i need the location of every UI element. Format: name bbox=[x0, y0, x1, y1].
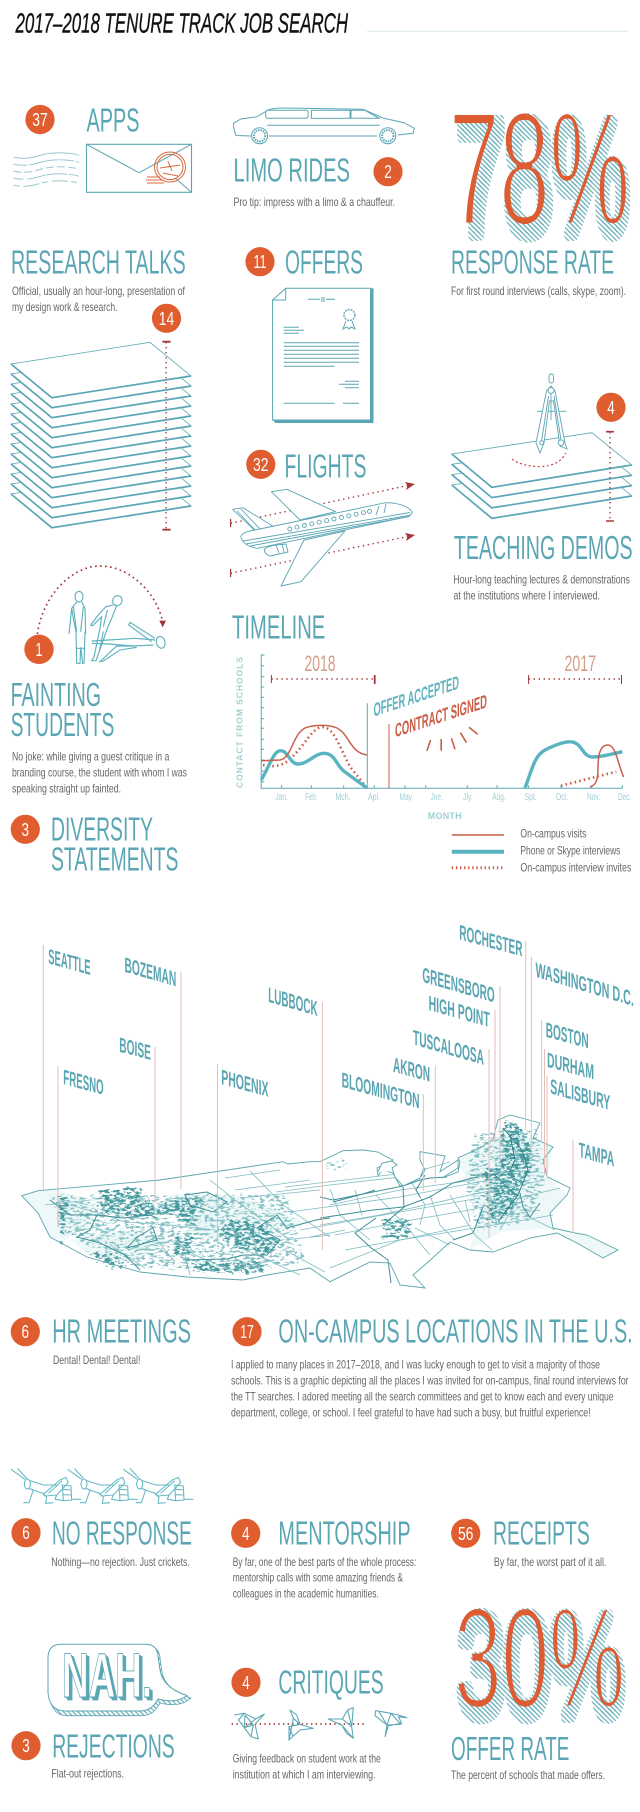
heading: apps: APPS bbox=[86, 102, 140, 140]
city labels: SEATTLE bbox=[48, 945, 91, 980]
axis: month labels: Aug. bbox=[492, 792, 506, 803]
badge: 32 bbox=[246, 450, 275, 479]
badge: 3: 3 bbox=[22, 820, 29, 840]
panel: limo rides bbox=[234, 108, 414, 209]
axis: month labels: Mch. bbox=[336, 792, 350, 803]
badge: 17 bbox=[232, 1317, 262, 1346]
icon: envelope bbox=[86, 144, 192, 192]
map: land fill bbox=[22, 1138, 618, 1262]
panel: timeline bbox=[232, 609, 631, 875]
icon: airplane bbox=[233, 489, 412, 586]
badge: 4 bbox=[231, 1668, 261, 1697]
axis: month labels bbox=[275, 792, 631, 803]
year: 2018: 2018 bbox=[304, 651, 336, 676]
axis: month labels: May bbox=[399, 792, 412, 803]
axis: y label: CONTACT FROM SCHOOLS bbox=[234, 657, 244, 788]
city labels: TUSCALOOSA bbox=[413, 1026, 484, 1070]
badge: 2 bbox=[373, 157, 403, 186]
map: dark terrain texture bbox=[44, 1116, 537, 1277]
badge: 2: 2 bbox=[384, 162, 392, 182]
year: 2017 bbox=[529, 651, 622, 684]
panel: receipts bbox=[451, 1515, 606, 1569]
map: Great Lakes bbox=[378, 1161, 423, 1186]
heading: HR meetings: HR MEETINGS bbox=[52, 1314, 191, 1351]
heading: timeline: TIMELINE bbox=[232, 609, 325, 646]
panel: apps bbox=[14, 102, 192, 192]
icon: postmark waves bbox=[14, 153, 79, 186]
series: on-campus visits bbox=[261, 725, 624, 787]
icon: origami birds bbox=[232, 1708, 407, 1740]
city labels: AKRON bbox=[393, 1053, 430, 1087]
city: Durham: DURHAM bbox=[547, 1048, 594, 1084]
heading: flights: FLIGHTS bbox=[284, 449, 366, 486]
axis: month labels: Nov. bbox=[587, 792, 600, 803]
icon: sheets with compass bbox=[452, 374, 632, 521]
panel: HR meetings bbox=[11, 1314, 191, 1367]
arrow: upper flight path bbox=[231, 482, 415, 527]
series: phone or skype interviews bbox=[261, 742, 622, 788]
icon: offer letter bbox=[273, 288, 374, 423]
caption: no response: Nothing—no rejection. Just crickets. bbox=[51, 1555, 190, 1569]
map: on-campus locations in the U.S. bbox=[22, 921, 634, 1288]
text: mentorship description: colleagues in the academic humanities. bbox=[233, 1587, 379, 1601]
heading: fainting students: FAINTING bbox=[11, 677, 101, 714]
map: rivers and borders bbox=[50, 1128, 540, 1283]
icon: NAH speech bubble: NAH. bbox=[64, 1642, 154, 1712]
badge: 4: 4 bbox=[607, 398, 615, 418]
panel: no response bbox=[11, 1468, 193, 1569]
axis: month labels: Jly. bbox=[463, 792, 473, 803]
badge: 11 bbox=[245, 247, 275, 276]
city labels: GREENSBORO bbox=[422, 963, 495, 1008]
text: mentorship description: By far, one of the best parts of the whole process: bbox=[233, 1555, 416, 1569]
marker: offer accepted bbox=[367, 672, 459, 788]
icon: NAH speech bubble: NAH. bbox=[62, 1641, 152, 1711]
title: 2017–2018 TENURE TRACK JOB SEARCH bbox=[15, 7, 348, 38]
text: fainting description: branding course, the student with whom I was bbox=[12, 766, 187, 780]
text: research talks description bbox=[12, 284, 185, 314]
badge: 4: 4 bbox=[242, 1524, 249, 1544]
city labels: HIGH POINT bbox=[429, 991, 490, 1032]
heading: limo rides: LIMO RIDES bbox=[234, 153, 350, 190]
map: outline of the U.S. bbox=[22, 1115, 618, 1288]
panel: offer rate bbox=[451, 1578, 625, 1782]
year: 2017: 2017 bbox=[564, 651, 596, 676]
panel: critiques bbox=[231, 1664, 407, 1782]
panel: teaching demos bbox=[452, 374, 633, 602]
map: light terrain texture bbox=[45, 1125, 550, 1278]
chart: timeline: OFFER ACCEPTED bbox=[374, 672, 459, 722]
heading: mentorship: MENTORSHIP bbox=[278, 1515, 411, 1552]
heading: offers: OFFERS bbox=[285, 244, 363, 281]
panel: on-campus locations bbox=[231, 1314, 633, 1419]
legend bbox=[452, 826, 631, 875]
axis: month labels: Apl. bbox=[368, 792, 380, 803]
legend: On-campus visits bbox=[520, 826, 586, 840]
badge: 6: 6 bbox=[22, 1322, 29, 1342]
city labels: BLOOMINGTON bbox=[342, 1068, 420, 1113]
text: critiques description bbox=[233, 1752, 381, 1782]
city labels: BOZEMAN bbox=[124, 953, 176, 991]
axis: x label: MONTH bbox=[428, 811, 462, 821]
panel: fainting students bbox=[11, 566, 187, 796]
arrow: lower flight path bbox=[231, 533, 415, 577]
badge: 32: 32 bbox=[253, 455, 269, 475]
badge: 6 bbox=[11, 1317, 40, 1346]
panel: diversity statements bbox=[11, 812, 178, 879]
heading: diversity statements: DIVERSITY bbox=[51, 812, 153, 849]
axes bbox=[261, 655, 622, 788]
axis: month labels: Jan. bbox=[275, 792, 288, 803]
panel: flights bbox=[231, 449, 415, 586]
badge: 3: 3 bbox=[22, 1736, 30, 1756]
heading: research talks: RESEARCH TALKS bbox=[11, 244, 186, 281]
text: mentorship description bbox=[233, 1555, 416, 1601]
chart: timeline bbox=[234, 651, 631, 821]
heading: diversity statements bbox=[51, 812, 178, 879]
icon: fainting figures with arc bbox=[37, 566, 166, 663]
panel: rejections bbox=[11, 1641, 191, 1780]
chart: timeline: CONTRACT SIGNED bbox=[395, 691, 487, 742]
badge: 37 bbox=[25, 105, 55, 134]
text: fainting description bbox=[12, 750, 187, 796]
city labels: LUBBOCK bbox=[268, 983, 318, 1021]
caption: limo: Pro tip: impress with a limo & a chauffeur. bbox=[234, 195, 395, 209]
heading: fainting students bbox=[11, 677, 114, 744]
badge: 56 bbox=[451, 1519, 480, 1548]
year: 2018 bbox=[271, 651, 375, 684]
city: Phoenix: PHOENIX bbox=[221, 1065, 269, 1102]
badge: 14: 14 bbox=[159, 309, 174, 329]
panel: mentorship bbox=[231, 1515, 416, 1601]
icon: crickets bbox=[11, 1468, 193, 1503]
text: critiques description: institution at which I am interviewing. bbox=[233, 1768, 376, 1782]
city labels: BOISE bbox=[119, 1033, 151, 1065]
badge: 6 bbox=[11, 1518, 41, 1547]
badge: 37: 37 bbox=[32, 110, 48, 130]
axis: month labels: Dec. bbox=[618, 792, 631, 803]
text: teaching demos description bbox=[454, 572, 630, 602]
text: fainting description: No joke: while giving a guest critique in a bbox=[12, 750, 170, 764]
text: critiques description: Giving feedback on student work at the bbox=[233, 1752, 381, 1766]
badge: 4 bbox=[596, 393, 626, 422]
heading: rejections: REJECTIONS bbox=[52, 1728, 175, 1765]
heading: critiques: CRITIQUES bbox=[278, 1664, 384, 1701]
badge: 56: 56 bbox=[458, 1524, 473, 1544]
axis: month labels: Feb. bbox=[305, 792, 318, 803]
city labels bbox=[48, 921, 634, 1172]
map: state lines bbox=[45, 1162, 560, 1275]
marker: contract signed bbox=[389, 691, 487, 788]
map: city pins bbox=[43, 941, 573, 1250]
icon: stack of 14 sheets bbox=[11, 342, 191, 530]
icon: limousine bbox=[234, 108, 414, 144]
text: research talks description: Official, usually an hour-long, presentation of bbox=[12, 284, 185, 298]
badge: 3 bbox=[11, 815, 40, 844]
panel: research talks bbox=[11, 244, 191, 530]
text: mentorship description: mentorship calls with some amazing friends & bbox=[233, 1571, 403, 1585]
text: on-campus description bbox=[231, 1357, 629, 1419]
panel: offers bbox=[245, 244, 374, 423]
heading: fainting students: STUDENTS bbox=[11, 707, 114, 744]
city labels: FRESNO bbox=[63, 1065, 104, 1100]
badge: 17: 17 bbox=[240, 1322, 254, 1342]
series: on-campus invites bbox=[263, 727, 616, 788]
heading: no response: NO RESPONSE bbox=[52, 1515, 192, 1552]
city labels: BOSTON bbox=[546, 1018, 589, 1053]
badge: 4 bbox=[231, 1519, 260, 1548]
axis: month labels: Oct. bbox=[556, 792, 568, 803]
heading: diversity statements: STATEMENTS bbox=[51, 842, 178, 879]
caption: rejections: Flat-out rejections. bbox=[51, 1766, 124, 1780]
city labels: ROCHESTER bbox=[459, 921, 523, 961]
badge: 1: 1 bbox=[36, 640, 42, 660]
badge: 1 bbox=[24, 635, 54, 664]
panel: response rate bbox=[449, 78, 630, 298]
badge: 11: 11 bbox=[254, 252, 266, 272]
icon: NAH speech bubble: NAH. bbox=[65, 1644, 155, 1714]
badge: 14 bbox=[152, 304, 181, 333]
badge: 4: 4 bbox=[242, 1673, 250, 1693]
axis: month labels: Spt. bbox=[525, 792, 537, 803]
caption: HR meetings: Dental! Dental! Dental! bbox=[53, 1353, 140, 1367]
badge: 3 bbox=[11, 1731, 41, 1760]
axis: month labels: Jne. bbox=[430, 792, 443, 803]
text: research talks description: my design work & research. bbox=[12, 300, 118, 314]
text: fainting description: speaking straight up fainted. bbox=[12, 782, 121, 796]
badge: 6: 6 bbox=[22, 1523, 30, 1543]
